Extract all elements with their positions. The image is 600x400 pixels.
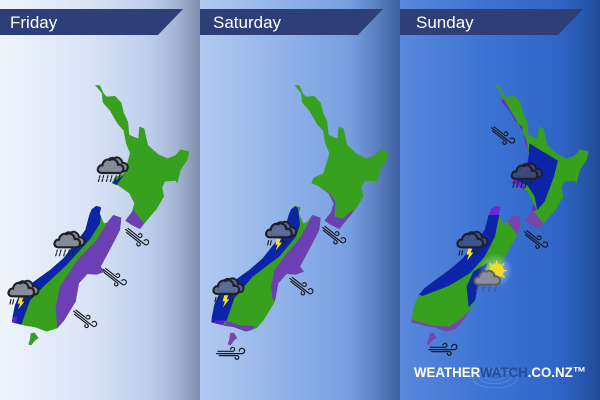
logo: WeatherWatch: WEATHERWATCH.CO.NZ™ (414, 365, 586, 381)
map: New Zealand Friday (7, 77, 197, 345)
icon: thunder cloud (8, 281, 38, 310)
map: New Zealand Saturday (206, 77, 396, 359)
South Island (211, 206, 321, 332)
South Island (12, 206, 122, 332)
logo: WeatherWatch (414, 365, 586, 388)
panel: Saturday (200, 0, 400, 400)
icon: thunder cloud (213, 278, 243, 307)
map: New Zealand Sunday (406, 77, 596, 355)
icon: wind (319, 223, 347, 248)
Stewart Island (228, 333, 237, 345)
panel: Sunday (400, 0, 600, 400)
panel background: Sunday (400, 0, 600, 400)
heading: Saturday: Saturday (213, 13, 282, 32)
panel background: Friday (0, 0, 200, 400)
heading: Saturday (200, 9, 383, 35)
icon: wind (100, 265, 128, 290)
icon: wind (287, 274, 315, 299)
icon: wind (70, 306, 98, 332)
panel: Friday (0, 0, 200, 400)
icon: wind (122, 225, 150, 250)
icon: rain cloud (54, 232, 84, 256)
North Island (494, 85, 588, 229)
icon: wind (521, 227, 549, 252)
icon: thunder cloud (266, 222, 296, 251)
icon: thunder cloud (457, 232, 487, 261)
icon: sun behind rain cloud (474, 253, 513, 291)
Stewart Island (427, 333, 437, 345)
icon: wind (488, 123, 516, 148)
icon: rain cloud dark (512, 163, 542, 188)
South Island (411, 206, 520, 332)
heading: Friday (0, 9, 183, 35)
Stewart Island (28, 333, 39, 345)
heading: Friday: Friday (10, 13, 58, 32)
heading: Sunday: Sunday (416, 13, 474, 32)
North Island (95, 85, 190, 229)
icon: wind (217, 347, 245, 359)
heading: Sunday (400, 9, 583, 35)
icon: wind (429, 343, 457, 355)
icon: rain cloud (98, 157, 128, 182)
North Island (294, 85, 388, 229)
panel background: Saturday (200, 0, 400, 400)
